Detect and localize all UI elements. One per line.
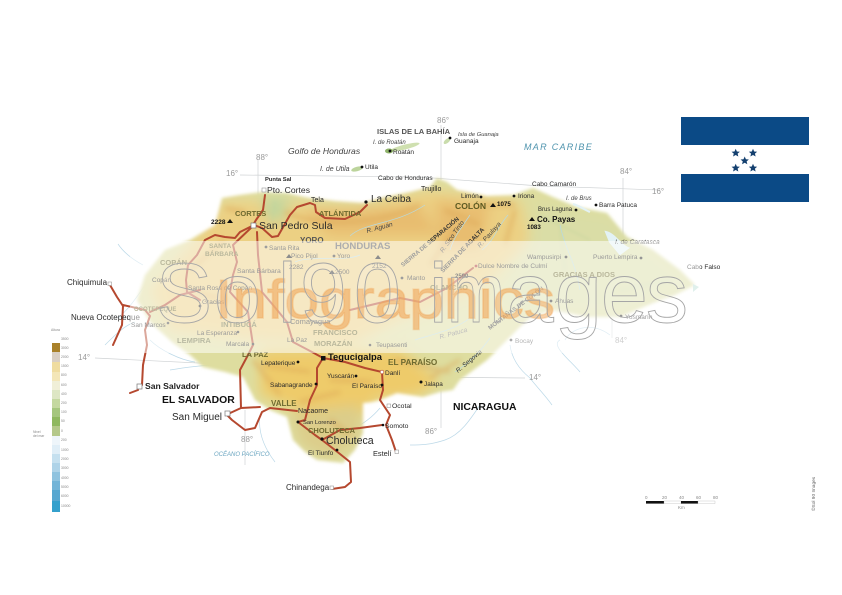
- place labels: south: Ocotal: [392, 403, 412, 410]
- place labels: center and west: Chiquimula: [67, 278, 108, 287]
- place labels: center and west: Teupasenti: [376, 342, 407, 349]
- flag stars: [732, 149, 757, 172]
- elevation legend: 3000: [61, 466, 69, 470]
- map: Honduras terrain: [120, 170, 710, 470]
- elevation legend: Nivel: [33, 430, 41, 434]
- elevation legend: del mar: [33, 434, 45, 438]
- place labels: center and west: Yoro: [337, 253, 351, 260]
- place labels: north and islands: [211, 127, 721, 271]
- place labels: north and islands: ATLÁNTIDA: [319, 209, 362, 218]
- place labels: south: EL PARAÍSO: [388, 357, 438, 367]
- elevation legend: 600: [61, 383, 67, 387]
- place labels: center and west: LEMPIRA: [177, 336, 211, 345]
- place labels: center and west: OLANCHO: [430, 283, 468, 292]
- water labels: MAR CARIBE: [524, 142, 593, 152]
- place labels: center and west: COPÁN: [160, 258, 187, 267]
- elevation legend: 0: [61, 429, 63, 433]
- elevation legend: 200: [61, 438, 67, 442]
- elevation legend: 200: [61, 401, 67, 405]
- watermark band: [130, 241, 700, 353]
- legend colour ramp: [52, 343, 60, 512]
- islands: [351, 137, 451, 173]
- place labels: north and islands: ISLAS DE LA BAHÍA: [377, 127, 451, 136]
- watermark: Infographics: Infographics: [215, 268, 555, 330]
- place labels: center and west: R. Sico Tinto: [439, 219, 466, 254]
- place labels: center and west: OCOTEPEQUE: [134, 307, 176, 313]
- place labels: south: LA PAZ: [242, 350, 269, 359]
- graticule labels: 86°: [437, 116, 449, 125]
- place labels: center and west: Santa Rosa de Copán: [188, 285, 252, 292]
- watermark: Sol90images: Sol90i: [156, 246, 448, 340]
- place labels: north and islands: Limón: [461, 193, 479, 200]
- graticule labels: 14°: [529, 373, 541, 382]
- place labels: north and islands: Tela: [311, 197, 324, 204]
- graticule and foreign rivers: [95, 125, 660, 465]
- place labels: center and west: Wampusirpi: [527, 254, 561, 261]
- place labels: south: Estelí: [373, 449, 392, 458]
- country labels: [162, 395, 517, 413]
- elevation legend: 3500: [61, 337, 69, 341]
- elevation legend: 10000: [61, 504, 71, 508]
- place labels: center and west: INTIBUCÁ: [221, 320, 257, 329]
- place labels: north and islands: YORO: [300, 236, 324, 245]
- place labels: center and west: 2152: [372, 263, 387, 270]
- watermark: Sol90images: m: [447, 246, 505, 340]
- place labels: south: San Miguel: [172, 412, 222, 423]
- place labels: south: R. Segovia: [455, 348, 484, 375]
- place labels: center and west: Copán: [152, 277, 172, 284]
- elevation legend: 100: [61, 410, 67, 414]
- place labels: south: San Lorenzo: [303, 420, 336, 426]
- place labels: center and west: Gracias: [202, 299, 225, 306]
- place labels: center and west: FRANCISCO: [313, 328, 358, 337]
- place labels: center and west: Ahuas: [555, 298, 574, 305]
- graticule labels: 14°: [78, 353, 90, 362]
- place labels: north and islands: Golfo de Honduras: [288, 146, 361, 156]
- flag of Honduras: [681, 117, 809, 202]
- elevation legend: 5000: [61, 485, 69, 489]
- elevation legend: 2000: [61, 355, 69, 359]
- country labels: EL SALVADOR: [162, 395, 235, 406]
- graticule labels: 88°: [256, 153, 268, 162]
- place labels: south: Sabanagrande: [270, 382, 313, 389]
- place labels: north and islands: 2228: [211, 219, 226, 226]
- water labels: [214, 142, 593, 458]
- place labels: center and west: R. Patuca: [439, 327, 468, 341]
- place labels: center and west: Nueva Ocotepeque: [71, 313, 140, 322]
- lagoons and rivers: [295, 204, 699, 372]
- place labels: center and west: Manto: [407, 275, 425, 282]
- place labels: south: VALLE: [271, 399, 297, 408]
- elevation legend: [33, 328, 71, 512]
- elevation legend: 3000: [61, 346, 69, 350]
- place labels: center and west: La Esperanza: [197, 330, 237, 337]
- place labels: north and islands: I. de Utila: [320, 166, 350, 173]
- place labels: center and west: San Marcos: [131, 322, 166, 329]
- watermark: Sol90images: ages: [507, 246, 688, 340]
- place labels: north and islands: Cabo Falso: [687, 264, 721, 271]
- place labels: north and islands: Brus Laguna: [538, 207, 573, 213]
- place labels: south: CHOLUTECA: [308, 426, 356, 435]
- place labels: center and west: Comayagua: [290, 317, 331, 326]
- place labels: north and islands: Isla de Guanaja: [458, 132, 499, 138]
- place labels: center and west: Pico Pijol: [291, 253, 318, 260]
- place labels: center and west: SANTA: [209, 243, 231, 250]
- place labels: center and west: La Paz: [287, 337, 307, 344]
- scale bar: [645, 495, 719, 510]
- place labels: center and west: Santa Rita: [269, 245, 300, 252]
- place labels: north and islands: Punta Sal: [265, 177, 292, 183]
- graticule labels: [78, 116, 664, 444]
- place labels: south: Yuscarán: [327, 373, 354, 380]
- place labels: south: Choluteca: [326, 435, 374, 447]
- scale bar: 0: [645, 495, 648, 500]
- scale bar: 20: [662, 495, 668, 500]
- graticule labels: 16°: [652, 187, 664, 196]
- elevation legend: 6000: [61, 494, 69, 498]
- elevation legend: 4000: [61, 476, 69, 480]
- place labels: north and islands: COLÓN: [455, 200, 486, 211]
- place labels: center and west: SIERRA DE SEPARACIÓN: [399, 215, 461, 269]
- place labels: center and west: 2590: [455, 274, 469, 280]
- place labels: north and islands: Guanaja: [454, 138, 479, 145]
- place labels: center and west: Santa Bárbara: [237, 268, 281, 275]
- graticule labels: 84°: [615, 336, 627, 345]
- place labels: center and west: 2282: [289, 264, 304, 271]
- graticule labels: 88°: [241, 435, 253, 444]
- place labels: center and west: Yusmarín: [625, 314, 653, 321]
- water labels: OCÉANO PACÍFICO: [214, 451, 270, 458]
- place labels: north and islands: Pto. Cortes: [267, 185, 310, 195]
- country labels: NICARAGUA: [453, 402, 517, 413]
- place labels: north and islands: HONDURAS: [335, 241, 391, 252]
- place labels: north and islands: I. de Roatán: [373, 140, 406, 146]
- place labels: center and west: BÁRBARA: [205, 249, 239, 258]
- place labels: south: Danlí: [385, 370, 400, 377]
- graticule labels: 86°: [425, 427, 437, 436]
- place labels: north and islands: 1075: [497, 201, 511, 208]
- place labels: north and islands: Cabo Camarón: [532, 181, 576, 188]
- place labels: center and west: Bocay: [515, 338, 534, 345]
- place labels: south: Somoto: [385, 423, 409, 430]
- credit: ©Sol 90 Images: [810, 476, 817, 511]
- place labels: north and islands: R. Aguán: [366, 221, 394, 235]
- place labels: center and west: 2500: [335, 269, 350, 276]
- place labels: north and islands: Iriona: [518, 193, 535, 200]
- place labels: center and west: R. Paulaya: [476, 221, 503, 249]
- place labels: center and west: Marcala: [226, 341, 250, 348]
- elevation legend: Altura: [51, 328, 60, 332]
- elevation legend: 800: [61, 373, 67, 377]
- place labels: north and islands: La Ceiba: [371, 194, 411, 205]
- place labels: south: Tegucigalpa: [328, 351, 383, 362]
- place labels: north and islands: San Pedro Sula: [259, 220, 333, 232]
- scale bar: 80: [713, 495, 719, 500]
- scale bar: 60: [696, 495, 702, 500]
- place labels: south: El Tiunfo: [308, 450, 334, 457]
- place labels: south: Lepaterique: [261, 360, 296, 367]
- place labels: center and west: Dulce Nombre de Culmí: [478, 263, 548, 270]
- place labels: north and islands: I. de Caratasca: [615, 239, 660, 246]
- place labels: north and islands: Roatán: [393, 149, 414, 156]
- elevation legend: 2000: [61, 457, 69, 461]
- elevation legend: 1000: [61, 448, 69, 452]
- place labels: north and islands: Barra Patuca: [599, 202, 637, 209]
- place labels: center and west: MORAZÁN: [314, 339, 352, 348]
- elevation legend: 400: [61, 392, 67, 396]
- place labels: north and islands: Trujillo: [421, 186, 441, 193]
- place labels: north and islands: Co. Payas: [537, 215, 576, 224]
- scale bar: 40: [679, 495, 685, 500]
- place labels: center and west: MONTAÑAS DE COLÓN: [486, 285, 545, 332]
- place labels: center and west: GRACIAS A DIOS: [553, 270, 615, 279]
- elevation legend: 50: [61, 419, 65, 423]
- place labels: south: Jalapa: [424, 381, 443, 388]
- place labels: north and islands: I. de Brus: [566, 196, 592, 202]
- place labels: south: Nacaome: [298, 408, 328, 415]
- place labels: north and islands: 1083: [527, 224, 541, 231]
- place labels: center and west: SIERRA DE AGALTA: [439, 226, 486, 274]
- place labels: center and west: [67, 215, 653, 349]
- roads: [110, 195, 473, 489]
- elevation legend: 1500: [61, 364, 69, 368]
- place labels: south: [137, 348, 484, 492]
- graticule labels: 84°: [620, 167, 632, 176]
- place labels: center and west: Puerto Lempira: [593, 254, 638, 261]
- place labels: south: El Paraíso: [352, 383, 382, 390]
- place labels: south: Chinandega: [286, 483, 330, 492]
- watermark: Sol90images: [156, 246, 688, 340]
- place labels: north and islands: Utila: [365, 164, 378, 171]
- scale bar: Km: [678, 505, 685, 510]
- graticule labels: 16°: [226, 169, 238, 178]
- place labels: north and islands: Cabo de Honduras: [378, 175, 433, 182]
- place labels: north and islands: CORTES: [235, 209, 266, 218]
- place labels: south: San Salvador: [145, 381, 200, 391]
